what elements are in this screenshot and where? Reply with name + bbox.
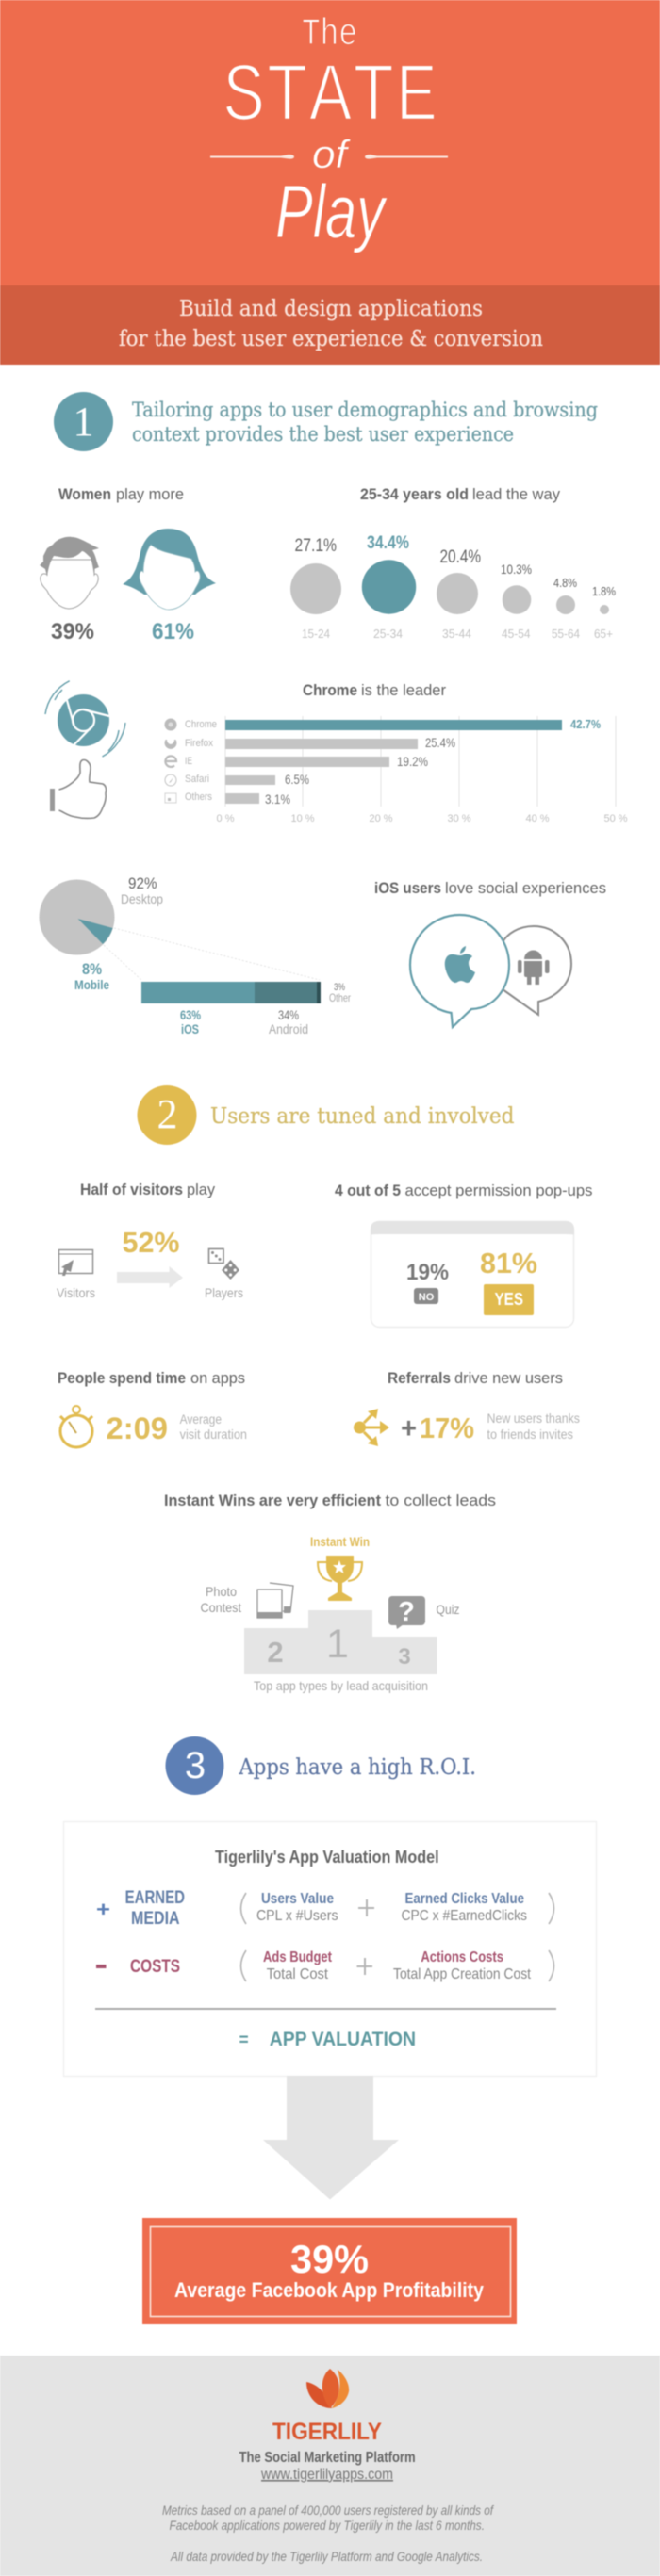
footer <box>0 2356 660 2576</box>
heading: play <box>187 1181 215 1198</box>
age 35-44: 35-44 <box>442 627 471 641</box>
podium number 2: 2 <box>267 1636 284 1669</box>
age 15-24: 27.1% <box>294 536 337 556</box>
heading: Instant Wins are very efficient <box>164 1492 381 1509</box>
referral stat: 17% <box>420 1411 474 1444</box>
iOS share label: iOS <box>181 1021 199 1036</box>
section 3 title: Apps have a high R.O.I. <box>239 1755 476 1780</box>
Visitors label: Visitors <box>57 1285 95 1300</box>
panel: iOS social experiences <box>374 879 606 1027</box>
age 35-44 <box>437 547 481 641</box>
heading: lead the way <box>472 485 560 503</box>
mobile label <box>74 960 109 992</box>
heading <box>164 1492 496 1509</box>
methodology note <box>162 2503 495 2564</box>
panel: women play more <box>40 485 216 644</box>
section 1 title line 1: Tailoring apps to user demographics and browsing <box>132 399 598 421</box>
age 15-24: 15-24 <box>302 627 330 641</box>
age 45-54 <box>501 562 532 641</box>
podium <box>244 1610 437 1674</box>
card title: Tigerlily's App Valuation Model <box>215 1848 439 1867</box>
callout: profitability <box>142 2218 517 2324</box>
heading: love social experiences <box>445 879 606 897</box>
panel: referrals <box>354 1369 580 1446</box>
heading: iOS users <box>374 879 441 897</box>
app valuation result: = <box>239 2030 249 2050</box>
x axis labels: 30 % <box>447 813 471 824</box>
heading: People spend time <box>58 1369 186 1387</box>
earned media row <box>96 1888 554 1929</box>
desktop label: Desktop <box>121 891 163 906</box>
section 1 title line 2: context provides the best user experience <box>132 423 514 446</box>
Other share label: Other <box>329 991 351 1004</box>
bar: Safari: 6.5% <box>285 772 309 787</box>
bar: Firefox: 25.4% <box>425 735 455 750</box>
mobile label: 8% <box>82 960 102 978</box>
heading <box>58 485 184 503</box>
number badge 3 <box>166 1736 224 1795</box>
Photo Contest label: Photo <box>206 1584 237 1599</box>
profitability caption: Average Facebook App Profitability <box>174 2278 485 2302</box>
bar: Chrome <box>164 717 601 731</box>
arrow <box>117 1266 183 1288</box>
bar: Others: Others <box>185 791 212 803</box>
earned media row: MEDIA <box>131 1909 180 1929</box>
referral caption: New users thanks <box>487 1410 580 1426</box>
bar: Chrome: Chrome <box>185 719 217 730</box>
YES button <box>484 1284 534 1315</box>
bar: Firefox <box>165 735 455 750</box>
age 55-64: 4.8% <box>553 576 577 590</box>
costs row: Ads Budget <box>263 1949 333 1965</box>
x axis labels: 50 % <box>603 813 628 824</box>
bar: Chrome: 42.7% <box>570 717 601 731</box>
icon: trophy <box>318 1556 362 1601</box>
Android share label <box>269 1007 308 1036</box>
heading: 4 out of 5 <box>335 1182 401 1199</box>
website: www.tigerlilyapps.com <box>260 2467 393 2483</box>
age 45-54: 10.3% <box>501 562 532 577</box>
panel: desktop vs mobile pie <box>40 874 351 1036</box>
duration stat: 2:09 <box>106 1411 168 1445</box>
NO button: NO <box>419 1292 435 1303</box>
methodology note: Facebook applications powered by Tigerlily in the last 6 months. <box>170 2518 485 2533</box>
icon: thumbs up <box>50 760 107 818</box>
panel: permission pop-ups <box>335 1182 592 1327</box>
bar: IE: 19.2% <box>397 754 428 769</box>
down arrow <box>263 2076 399 2199</box>
Android share label: Android <box>269 1021 308 1036</box>
Instant Win label: Instant Win <box>310 1534 370 1549</box>
x axis labels: 20 % <box>369 813 393 824</box>
mobile label: Mobile <box>74 977 109 992</box>
age 15-24 <box>290 536 341 641</box>
header banner <box>0 0 660 285</box>
costs row <box>96 1949 554 1982</box>
panel: half of visitors play <box>57 1181 243 1300</box>
panel: browser bar chart <box>164 681 628 824</box>
tagline: The Social Marketing Platform <box>239 2450 416 2466</box>
costs row: Total Cost <box>267 1966 329 1982</box>
age 65+: 65+ <box>594 627 613 641</box>
heading: accept permission pop-ups <box>405 1182 592 1199</box>
bar: IE <box>165 754 428 769</box>
age 65+ <box>592 584 616 641</box>
age 35-44: 20.4% <box>439 547 481 567</box>
icon: photos <box>257 1583 293 1618</box>
methodology note: Metrics based on a panel of 400,000 users registered by all kinds of <box>162 2503 495 2518</box>
male percentage: 39% <box>51 619 94 644</box>
heading: is the leader <box>361 681 446 699</box>
panel: valuation model card <box>64 1822 596 2077</box>
heading <box>360 485 560 503</box>
age 65+: 1.8% <box>592 584 616 598</box>
desktop label <box>121 874 163 906</box>
icon: female face <box>123 529 216 610</box>
bar: Firefox: Firefox <box>185 738 213 749</box>
podium caption: Top app types by lead acquisition <box>254 1678 428 1693</box>
heading: Referrals <box>388 1369 451 1387</box>
bar: Others <box>165 791 290 807</box>
earned media row: Earned Clicks Value <box>405 1891 524 1907</box>
Photo Contest label: Contest <box>200 1600 241 1615</box>
Other share label: 3% <box>334 982 345 993</box>
icon: dice <box>209 1249 239 1280</box>
icon: chrome logo with arcs <box>45 681 125 757</box>
desktop label: 92% <box>128 874 157 892</box>
number badge 1 <box>54 392 113 451</box>
panel: time on apps <box>58 1369 247 1447</box>
icon: apple speech bubble <box>410 915 509 1027</box>
profitability stat: 39% <box>290 2237 369 2281</box>
title divider left <box>210 155 294 159</box>
referral caption <box>487 1410 580 1442</box>
title: STATE: STATE <box>223 52 438 145</box>
costs row: Total App Creation Cost <box>393 1966 531 1982</box>
age 25-34 <box>362 533 416 641</box>
badge digit 1: 1 <box>74 399 94 445</box>
pie chart <box>40 880 115 955</box>
duration caption <box>180 1411 247 1442</box>
number badge 2 <box>138 1085 196 1145</box>
iOS share label <box>180 1007 201 1036</box>
age 25-34: 25-34 <box>373 627 403 641</box>
YES stat: 81% <box>480 1247 537 1280</box>
app valuation result: APP VALUATION <box>270 2029 416 2050</box>
methodology note: All data provided by the Tigerlily Platform and Google Analytics. <box>170 2549 483 2564</box>
mobile OS stacked bar <box>141 982 321 1003</box>
age 55-64: 55-64 <box>552 627 580 641</box>
earned media row: CPC x #EarnedClicks <box>402 1908 527 1924</box>
subtitle line 2: for the best user experience & conversion <box>119 327 543 351</box>
panel: age bubbles <box>290 485 616 641</box>
heading <box>388 1369 563 1387</box>
heading: play more <box>116 485 184 503</box>
podium number 3: 3 <box>398 1644 411 1670</box>
section 3 heading <box>166 1736 476 1795</box>
title divider right <box>365 155 448 159</box>
x axis labels: 40 % <box>525 813 550 824</box>
NO button <box>414 1288 438 1304</box>
earned media row: CPL x #Users <box>256 1908 338 1924</box>
section 2 title: Users are tuned and involved <box>210 1104 515 1129</box>
Android share label: 34% <box>278 1007 299 1022</box>
duration caption: Average <box>180 1411 222 1427</box>
brand name: TIGERLILY <box>272 2419 382 2445</box>
plus sign: + <box>401 1411 417 1444</box>
52% stat: 52% <box>123 1226 179 1259</box>
podium number 1: 1 <box>326 1622 349 1667</box>
x axis labels: 10 % <box>290 813 315 824</box>
panel: instant wins podium <box>164 1492 496 1693</box>
icon: android speech bubble <box>503 926 571 1015</box>
earned media row: + <box>96 1898 110 1921</box>
subtitle band <box>0 285 660 365</box>
referral caption: to friends invites <box>487 1427 573 1442</box>
age 55-64 <box>552 576 580 641</box>
icon: stopwatch <box>60 1406 92 1447</box>
Photo Contest label <box>200 1584 241 1615</box>
icon: share arrows <box>354 1409 389 1446</box>
NO stat: 19% <box>406 1260 449 1285</box>
icon: tigerlily logo <box>306 2369 349 2408</box>
heading: on apps <box>190 1369 245 1387</box>
subtitle line 1: Build and design applications <box>179 297 483 321</box>
icon: male face <box>40 537 99 609</box>
heading <box>303 681 446 699</box>
Other share label <box>329 982 351 1004</box>
age 25-34: 34.4% <box>367 533 409 553</box>
icon: quiz bubble: ? <box>398 1597 415 1627</box>
section 2 heading <box>138 1085 515 1145</box>
badge digit 2: 2 <box>157 1091 177 1137</box>
icon: browser window with cursor <box>58 1249 92 1276</box>
YES button: YES <box>494 1290 523 1309</box>
title: The: The <box>302 14 357 57</box>
heading: to collect leads <box>385 1492 496 1509</box>
x axis labels <box>217 813 628 824</box>
bar: Others: 3.1% <box>265 791 290 807</box>
badge digit 3: 3 <box>185 1745 206 1786</box>
bar: IE: IE <box>185 756 192 767</box>
x axis labels: 0 % <box>217 813 235 824</box>
Players label: Players <box>205 1285 243 1300</box>
duration caption: visit duration <box>180 1427 247 1442</box>
bar: Safari: Safari <box>185 774 209 785</box>
Quiz label: Quiz <box>436 1602 460 1617</box>
section 1 heading <box>54 392 598 451</box>
heading: 25-34 years old <box>360 485 469 503</box>
heading: Women <box>58 485 111 503</box>
title: of: of <box>312 132 352 176</box>
age 45-54: 45-54 <box>502 627 530 641</box>
heading <box>374 879 606 897</box>
costs row: COSTS <box>130 1957 180 1977</box>
iOS share label: 63% <box>180 1007 201 1022</box>
popup window <box>371 1221 574 1327</box>
bar: Safari <box>165 772 309 787</box>
earned media row: EARNED <box>125 1888 185 1908</box>
earned media row: Users Value <box>261 1891 334 1907</box>
title: Play: Play <box>275 170 388 253</box>
costs row: Actions Costs <box>421 1949 503 1965</box>
female percentage: 61% <box>152 619 194 644</box>
heading: Chrome <box>303 681 357 699</box>
heading: drive new users <box>454 1369 563 1387</box>
icon: quiz bubble <box>388 1596 425 1629</box>
heading: Half of visitors <box>80 1181 183 1198</box>
